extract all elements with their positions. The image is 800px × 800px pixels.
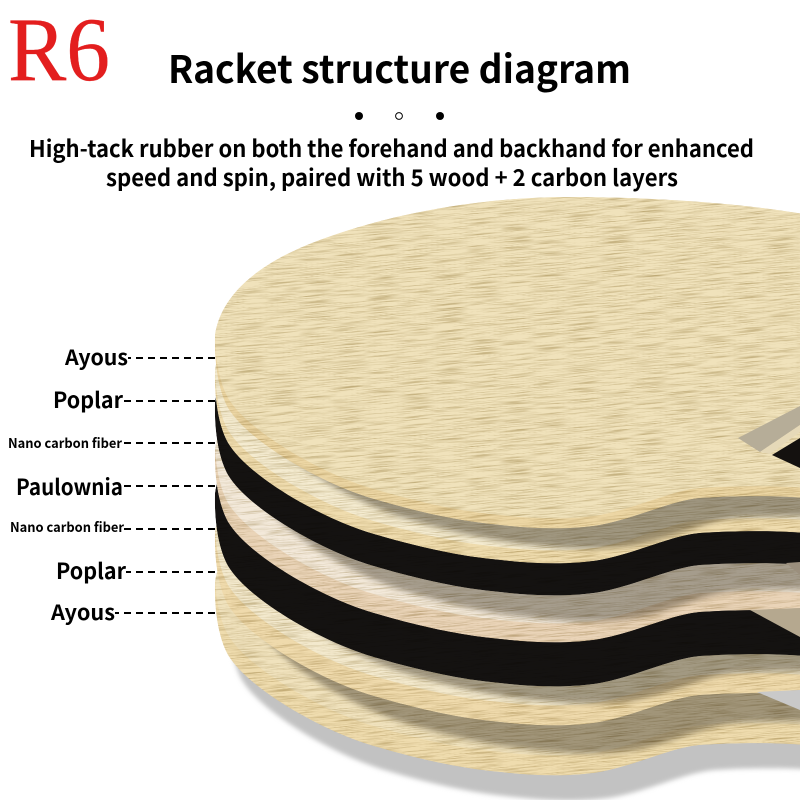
label: Poplar upper: Poplar [53, 383, 123, 415]
label: Ayous bottom: Ayous [50, 597, 115, 627]
title: Racket structure diagram [168, 39, 631, 94]
wood grain texture [215, 168, 800, 800]
label: Paulownia: Paulownia [16, 470, 123, 502]
subtitle: speed and spin, paired with 5 wood + 2 carbon layers [106, 159, 678, 193]
label: Nano carbon fiber upper: Nano carbon fiber [8, 432, 122, 452]
subtitle: High-tack rubber on both the forehand and backhand for enhanced [29, 130, 754, 164]
layer: upper poplar [215, 364, 800, 564]
layer: upper nano carbon fiber [214, 397, 800, 596]
label: Nano carbon fiber lower: Nano carbon fiber [10, 516, 124, 536]
layer: paulownia [215, 440, 800, 642]
ground shadow [229, 469, 800, 800]
layer: bottom ayous [215, 571, 800, 776]
layer: top ayous face [215, 187, 800, 528]
label: Ayous top: Ayous [64, 342, 128, 372]
layer: lower poplar [215, 524, 800, 726]
layer: lower nano carbon fiber [214, 484, 800, 686]
logo: R6: R6 [8, 0, 110, 100]
subtitle [29, 130, 754, 193]
label: Poplar lower: Poplar [56, 554, 126, 586]
decorative dots [355, 112, 444, 120]
handle notches [738, 406, 800, 710]
